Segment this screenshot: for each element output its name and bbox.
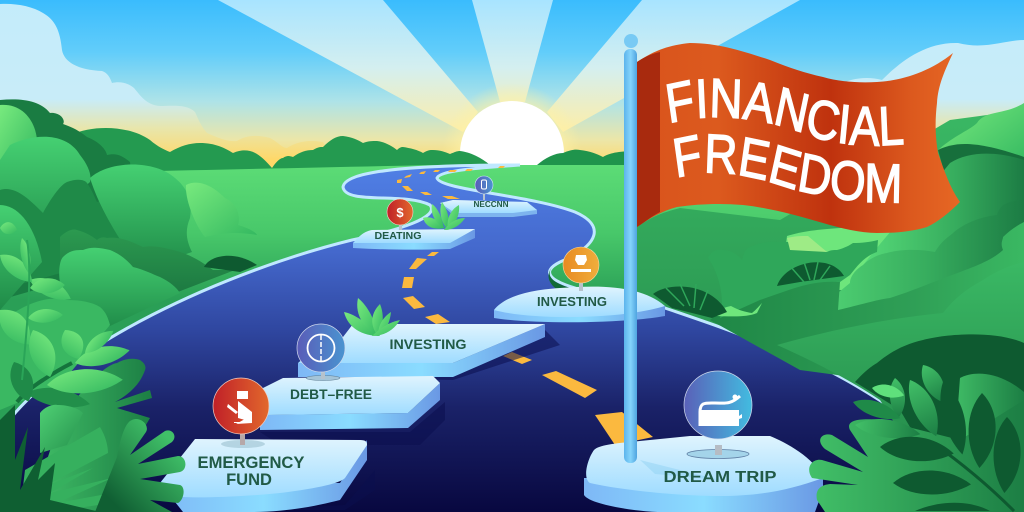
road [0, 165, 1024, 512]
pin: Investing right [563, 247, 599, 291]
road bend shadow [549, 266, 590, 298]
cloud: top left [0, 4, 340, 170]
spiked fan [20, 427, 112, 512]
label: Emergency Fund: EMERGENCY [198, 454, 304, 472]
label: Debt-free: DEBT–FREE [290, 387, 372, 402]
branch stem [933, 443, 1014, 511]
flag title [666, 78, 904, 204]
pin: Emergency Fund [213, 378, 269, 448]
big lobe [40, 405, 83, 453]
pin: Debt-free [297, 324, 345, 380]
foreground foliage: right [809, 360, 1024, 512]
dark leaf [5, 358, 39, 405]
pin: Deating: $ [396, 205, 404, 220]
leaf: bright [871, 382, 906, 401]
flag title: FINANCIAL [666, 78, 904, 146]
plant tuft on Deating [423, 202, 465, 230]
platform: Deating [353, 199, 475, 250]
mid leaves [854, 360, 951, 442]
platform: top [440, 176, 537, 217]
label: Investing right: INVESTING [537, 294, 607, 309]
label: Dream Trip: DREAM TRIP [664, 469, 777, 486]
palm silhouettes: right [653, 262, 844, 318]
branch leaves [0, 221, 131, 396]
flag: Financial Freedom [637, 43, 960, 233]
foreground foliage: left [0, 221, 185, 512]
left tree mass [0, 99, 257, 410]
dark arc bush [855, 334, 1024, 512]
platform shadows [250, 330, 560, 510]
pin: top [475, 176, 493, 200]
ground field [0, 165, 1024, 512]
large fan [809, 400, 1024, 512]
mid leaf [26, 383, 92, 412]
bright hillside [780, 225, 900, 290]
small back shrubs: right [708, 236, 878, 318]
lobed fan [95, 419, 185, 512]
label: top step: NECCNN [474, 200, 509, 209]
dark spikes [0, 405, 100, 512]
plant tuft on Investing [344, 298, 400, 336]
distant tree line [70, 128, 495, 178]
cloud: top right [840, 40, 1024, 150]
bush highlight: right [950, 374, 1024, 512]
flag pole [624, 34, 638, 463]
distant tree line: right [530, 150, 640, 172]
left palm silhouette [204, 256, 257, 272]
flag title: FREEDOM [674, 134, 900, 204]
platform: Emergency Fund [160, 378, 367, 512]
dark leaves [879, 379, 1022, 511]
platform: Dream Trip [584, 371, 823, 512]
platform: Investing lower [298, 298, 545, 377]
right back hill [637, 110, 1024, 512]
road centre dashes [397, 166, 653, 445]
platform: Debt-free [257, 324, 440, 430]
leaf: mid dark [851, 394, 903, 425]
label: Investing lower: INVESTING [390, 337, 466, 352]
back fan [30, 359, 152, 512]
sun [442, 83, 582, 223]
sun rays [218, 0, 800, 132]
platform: Investing right [494, 247, 665, 322]
sky [0, 0, 1024, 175]
road edge [1, 165, 1022, 503]
label: Emergency Fund [198, 454, 304, 489]
label: Deating: DEATING [374, 230, 422, 242]
label: Emergency Fund: FUND [226, 471, 272, 489]
pin: Dream Trip [684, 371, 752, 458]
right hills [710, 103, 1024, 512]
branch stem [17, 363, 72, 402]
